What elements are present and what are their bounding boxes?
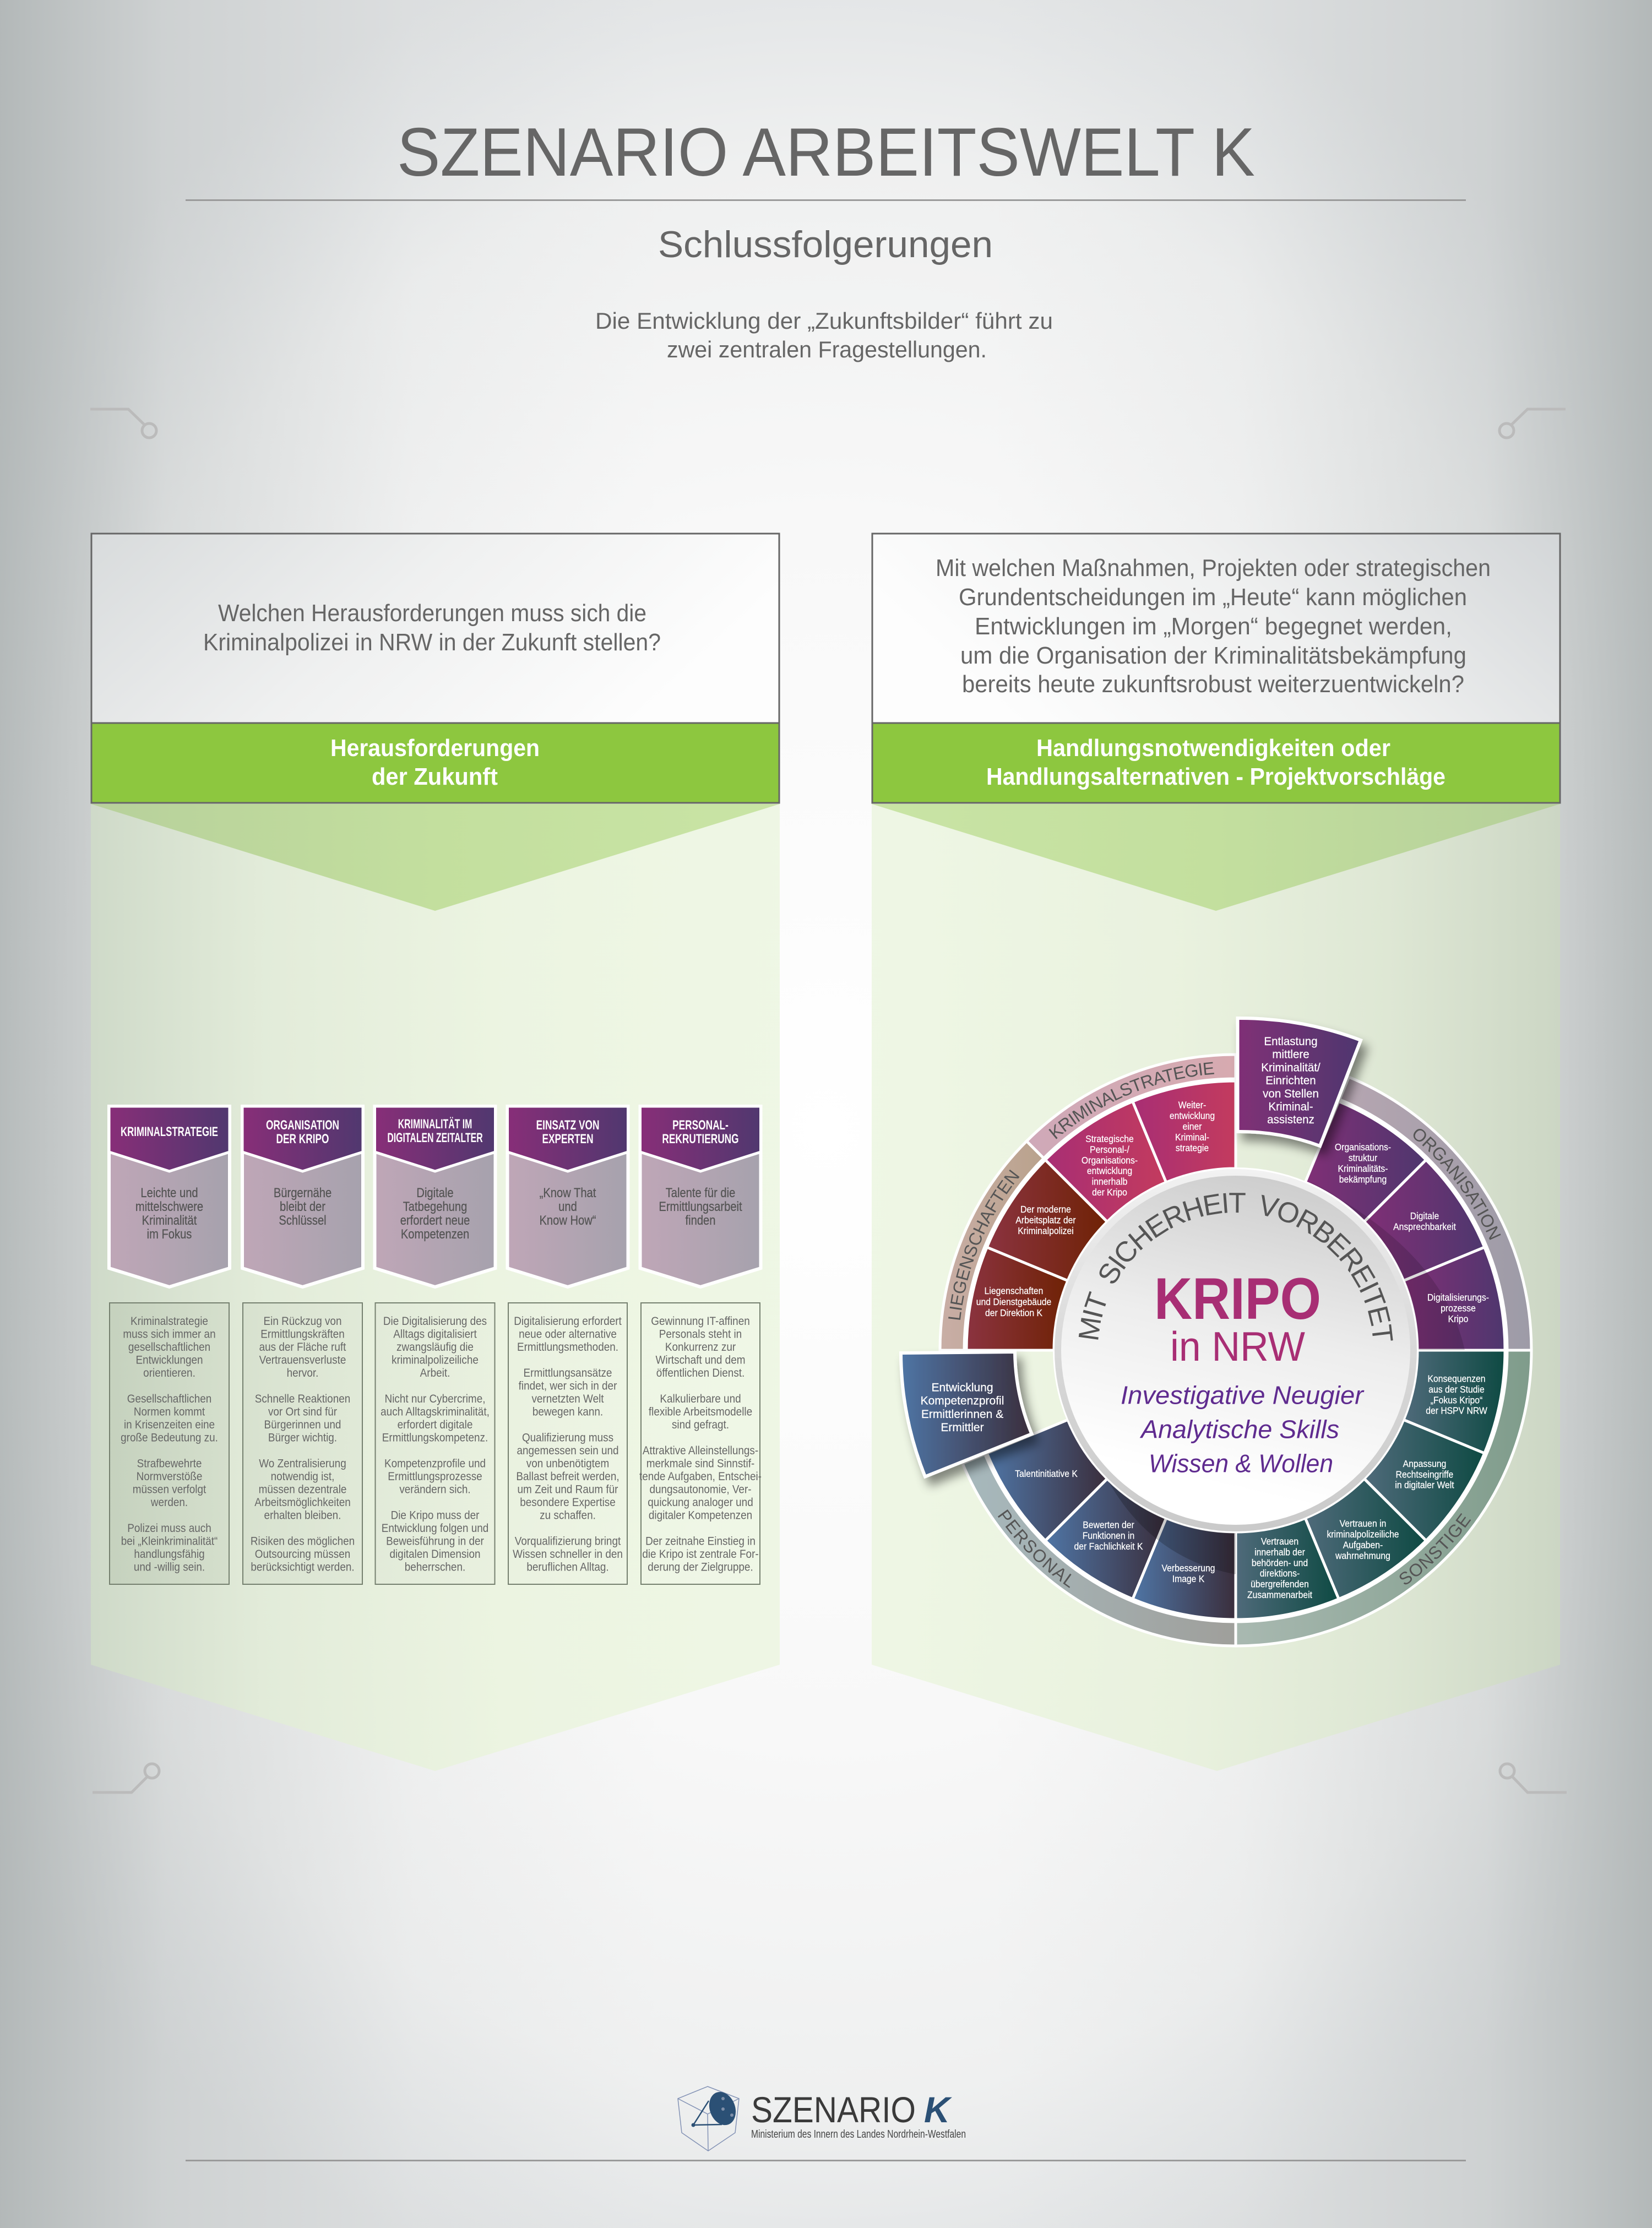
icon: corner mark bottom right	[1500, 1764, 1567, 1792]
shield body	[508, 1106, 628, 1287]
box text: Wissen schneller in den	[513, 1548, 623, 1561]
left green heading: Herausforderungen	[330, 735, 540, 762]
box text: öffentlichen Dienst.	[656, 1367, 745, 1379]
box text: vor Ort sind für	[268, 1405, 337, 1419]
segment labels: Aufgaben-	[1343, 1540, 1383, 1551]
segment labels: Bewerten der	[1083, 1519, 1134, 1530]
box text: bei „Kleinkriminalität“	[121, 1535, 218, 1548]
segment labels: der Fachlichkeit K	[1074, 1541, 1143, 1552]
box text: aus der Fläche ruft	[259, 1341, 346, 1354]
shield statement: „Know That	[540, 1185, 596, 1200]
box text: um Zeit und Raum für	[518, 1483, 618, 1496]
box text: Qualifizierung muss	[522, 1431, 613, 1444]
shield statement	[400, 1185, 470, 1241]
shield statement	[659, 1185, 742, 1227]
right question text	[936, 555, 1491, 698]
header label: PERSONAL-	[672, 1118, 729, 1133]
popped segment text: Ermittler	[941, 1421, 984, 1434]
segment labels: Konsequenzen	[1428, 1373, 1485, 1384]
header label	[662, 1118, 739, 1146]
popped segment text: von Stellen	[1263, 1088, 1319, 1100]
shield body	[242, 1106, 363, 1287]
column 5: Personalrekrutierung	[639, 1106, 762, 1584]
box text: Arbeit.	[420, 1367, 450, 1379]
box text: Entwicklungen	[136, 1354, 203, 1367]
popped segment text: Ermittlerinnen &	[921, 1408, 1003, 1421]
segment labels: strategie	[1176, 1143, 1209, 1154]
segment labels: Kriminal-	[1175, 1132, 1209, 1143]
header label: DIGITALEN ZEITALTER	[387, 1131, 483, 1145]
right question text: um die Organisation der Kriminalitätsbekämpfung	[960, 642, 1466, 669]
left green heading: der Zukunft	[372, 763, 498, 790]
segment: Konsequenzen	[1404, 1350, 1505, 1453]
column 2: Organisation der Kripo	[242, 1106, 363, 1584]
popped segment text: Kriminalität/	[1261, 1061, 1320, 1074]
right question text: bereits heute zukunftsrobust weiterzuentwickeln?	[962, 671, 1464, 698]
box text: Der zeitnahe Einstieg in	[645, 1535, 756, 1548]
ring band: Sonstige	[1236, 1350, 1531, 1646]
segment labels: Anpassung	[1403, 1458, 1446, 1469]
column 4: Einsatz von Experten	[508, 1106, 628, 1584]
segment: Weiterentwicklung	[1133, 1081, 1236, 1182]
shield statement: erfordert neue	[400, 1213, 470, 1227]
right question text: Entwicklungen im „Morgen“ begegnet werden,	[975, 613, 1452, 640]
box text: Ermittlungsprozesse	[388, 1470, 482, 1483]
ring label: Sonstige: SONSTIGE	[1400, 1513, 1471, 1585]
ring band: Kriminalstrategie	[1026, 1055, 1236, 1158]
right green heading: Handlungsnotwendigkeiten oder	[1036, 735, 1390, 762]
popped segment: Entwicklung Kompetenzprofil	[901, 1352, 1032, 1477]
segment: Vertrauen in Aufgabenwahrnehmung	[1305, 1479, 1426, 1599]
segment labels: Ansprechbarkeit	[1393, 1221, 1456, 1232]
segment labels: behörden- und	[1252, 1557, 1308, 1568]
shield statement: Kompetenzen	[401, 1226, 469, 1241]
box text: Ermittlungsansätze	[524, 1367, 612, 1379]
shield statement: Know How“	[539, 1213, 596, 1227]
shield header	[242, 1106, 363, 1171]
shield statement	[539, 1185, 596, 1227]
box text: in Krisenzeiten eine	[124, 1419, 215, 1431]
box text	[121, 1315, 218, 1574]
box text: von unbenötigtem	[526, 1457, 609, 1470]
box text: erfordert digitale	[398, 1419, 472, 1431]
segment labels: innerhalb	[1092, 1176, 1127, 1187]
box text	[513, 1315, 623, 1574]
box text: gesellschaftlichen	[128, 1341, 210, 1354]
box text: Risiken des möglichen	[251, 1535, 355, 1548]
ring band: Liegenschaften	[940, 1141, 1044, 1350]
segment: Organisationsstruktur	[1305, 1101, 1426, 1222]
segment: Liegenschaften	[966, 1247, 1068, 1350]
panel: left arrow chevron	[91, 804, 780, 911]
segment: Talentinitiative	[987, 1420, 1107, 1541]
box text: vernetzten Welt	[531, 1393, 604, 1405]
box text: Normen kommt	[134, 1405, 205, 1419]
segment labels: Arbeitsplatz der	[1015, 1215, 1076, 1226]
segment labels: „Fokus Kripo“	[1431, 1395, 1482, 1406]
box text: Wirtschaft und dem	[656, 1354, 745, 1367]
intro text	[595, 308, 1053, 362]
box text: Attraktive Alleinstellungs-	[643, 1444, 758, 1457]
box text: Alltags digitalisiert	[393, 1328, 477, 1341]
box text: Kalkulierbare und	[660, 1393, 741, 1405]
left question text: Welchen Herausforderungen muss sich die	[218, 600, 646, 627]
shield statement	[274, 1185, 332, 1227]
box text: die Kripo ist zentrale For-	[642, 1548, 759, 1561]
popped segment text: Entlastung	[1264, 1035, 1318, 1048]
header label: EINSATZ VON	[536, 1118, 599, 1133]
popped segment text: assistenz	[1267, 1113, 1314, 1126]
header label: DER KRIPO	[276, 1132, 329, 1146]
box text: Kriminalstrategie	[131, 1315, 208, 1328]
segment labels: der Direktion K	[985, 1307, 1042, 1318]
popped segment text: Entwicklung	[931, 1381, 993, 1394]
box text: Bürgerinnen und	[264, 1419, 341, 1431]
right question text: Grundentscheidungen im „Heute“ kann möglichen	[959, 584, 1467, 611]
box text: angemessen sein und	[517, 1444, 619, 1457]
shield statement: Talente für die	[666, 1185, 735, 1200]
segment labels: Rechtseingriffe	[1396, 1469, 1453, 1480]
box text: Strafbewehrte	[137, 1457, 202, 1470]
shield header	[508, 1106, 628, 1171]
right green heading: Handlungsalternativen - Projektvorschläge	[986, 763, 1446, 790]
box text: Nicht nur Cybercrime,	[385, 1393, 485, 1405]
text box	[243, 1303, 362, 1584]
segment: Vertrauen innerhalb	[1236, 1518, 1339, 1620]
right green heading	[872, 723, 1560, 803]
segment labels: Organisations-	[1335, 1142, 1391, 1153]
segment labels: in digitaler Welt	[1395, 1480, 1454, 1491]
ring label: Personal: PERSONAL	[998, 1509, 1072, 1588]
box text: Normverstöße	[137, 1470, 202, 1483]
logo subtitle: Ministerium des Innern des Landes Nordrhein-Westfalen	[751, 2128, 966, 2140]
popped segment: Entlastung	[1238, 1018, 1361, 1146]
box text: zwangsläufig die	[396, 1341, 474, 1354]
panel: right arrow chevron	[872, 804, 1560, 911]
segment labels: der HSPV NRW	[1426, 1405, 1487, 1416]
popped segment text: Kriminal-	[1268, 1100, 1313, 1113]
segment labels: Kriminalpolizei	[1018, 1225, 1074, 1236]
segment: Anpassung Rechtseingriffe	[1364, 1420, 1485, 1541]
logo K: K	[924, 2089, 952, 2130]
icon: corner mark top left	[90, 409, 156, 438]
shield statement: Ermittlungsarbeit	[659, 1199, 742, 1214]
segment labels: der Kripo	[1092, 1187, 1127, 1198]
column 3: Kriminalität im digitalen Zeitalter	[374, 1106, 496, 1584]
box text: digitaler Kompetenzen	[649, 1509, 752, 1522]
box text: Vertrauensverluste	[259, 1354, 346, 1367]
text box	[508, 1303, 627, 1584]
intro text: zwei zentralen Fragestellungen.	[667, 336, 987, 362]
in NRW: in NRW	[1170, 1323, 1305, 1370]
segment labels: Strategische	[1085, 1133, 1134, 1144]
italic lines: Investigative Neugier	[1121, 1381, 1365, 1410]
box text: Arbeitsmöglichkeiten	[254, 1496, 351, 1509]
box text: Ermittlungsmethoden.	[517, 1341, 618, 1354]
shadow crescent upper right	[1307, 1181, 1465, 1350]
segment labels: direktions-	[1260, 1568, 1300, 1579]
box text: Konkurrenz zur	[665, 1341, 736, 1354]
icon: cube with ellipse	[678, 2086, 740, 2151]
box text: müssen dezentrale	[259, 1483, 346, 1496]
segment labels: Vertrauen	[1261, 1536, 1298, 1547]
box text: und -willig sein.	[134, 1561, 205, 1574]
segment labels: entwicklung	[1170, 1110, 1215, 1121]
box text: erhalten bleiben.	[264, 1509, 341, 1522]
box text: handlungsfähig	[134, 1548, 205, 1561]
text box	[641, 1303, 760, 1584]
box text: Ein Rückzug von	[264, 1315, 341, 1328]
segment: Digitale Ansprechbarkeit	[1364, 1160, 1485, 1281]
shield header	[374, 1106, 496, 1171]
segment labels: kriminalpolizeiliche	[1327, 1529, 1399, 1540]
box text: tende Aufgaben, Entschei-	[639, 1470, 762, 1483]
shield statement: Digitale	[416, 1185, 454, 1200]
text box	[110, 1303, 229, 1584]
segment labels: Personal-/	[1090, 1144, 1129, 1155]
shadow crescent lower left	[1107, 1479, 1236, 1574]
segment labels: einer	[1183, 1121, 1202, 1132]
box text: derung der Zielgruppe.	[648, 1561, 753, 1574]
header label	[536, 1118, 599, 1146]
segment labels: Weiter-	[1178, 1100, 1206, 1111]
panel: left question box	[91, 534, 779, 723]
box text: Personals steht in	[659, 1328, 742, 1341]
shield statement: Tatbegehung	[403, 1199, 467, 1214]
segment labels: und Dienstgebäude	[976, 1296, 1051, 1307]
segment labels: aus der Studie	[1428, 1384, 1485, 1395]
popped segment text: mittlere	[1272, 1048, 1309, 1061]
segment labels: Kripo	[1448, 1313, 1468, 1324]
segment labels: entwicklung	[1087, 1165, 1132, 1176]
segment labels: übergreifenden	[1251, 1579, 1309, 1590]
shield statement: Schlüssel	[279, 1213, 327, 1227]
box text: kriminalpolizeiliche	[392, 1354, 479, 1367]
segment: Bewerten der Funktionen	[1045, 1479, 1166, 1599]
box text: muss sich immer an	[123, 1328, 216, 1341]
curved slogan: MIT SICHERHEIT VORBEREITET	[1078, 1193, 1393, 1341]
segment labels: Der moderne	[1020, 1204, 1071, 1215]
segment labels	[976, 1100, 1489, 1600]
box text: müssen verfolgt	[133, 1483, 206, 1496]
box text: Wo Zentralisierung	[259, 1457, 346, 1470]
box text: beherrschen.	[405, 1561, 465, 1574]
box text: Digitalisierung erfordert	[514, 1315, 622, 1328]
segment labels: wahrnehmung	[1335, 1550, 1390, 1561]
intro text: Die Entwicklung der „Zukunftsbilder“ führt zu	[595, 308, 1053, 334]
box text: Gesellschaftlichen	[127, 1393, 211, 1405]
shield header	[640, 1106, 761, 1171]
segment labels: innerhalb der	[1254, 1547, 1305, 1558]
icon: corner mark top right	[1499, 409, 1566, 438]
segment labels: Funktionen in	[1083, 1530, 1134, 1541]
segment labels: Digitale	[1410, 1210, 1439, 1221]
header label: ORGANISATION	[266, 1118, 339, 1133]
shield statement: Bürgernähe	[274, 1185, 332, 1200]
shield statement: und	[558, 1199, 577, 1214]
box text: Vorqualifizierung bringt	[515, 1535, 621, 1548]
box text: Polizei muss auch	[127, 1522, 211, 1535]
italic lines	[1121, 1381, 1365, 1478]
popped segment text	[1261, 1035, 1320, 1126]
subtitle: Schlussfolgerungen	[658, 224, 993, 265]
box text: Beweisführung in der	[386, 1535, 484, 1548]
segment labels: Talentinitiative K	[1015, 1468, 1078, 1479]
panel: right question box	[872, 534, 1560, 723]
box text: findet, wer sich in der	[519, 1379, 617, 1393]
box text: Kompetenzprofile und	[384, 1457, 486, 1470]
panel: right arrow background	[872, 803, 1560, 1771]
segment labels: bekämpfung	[1339, 1174, 1387, 1185]
box text: hervor.	[287, 1367, 318, 1379]
segment labels: Liegenschaften	[985, 1285, 1043, 1296]
italic lines: Wissen & Wollen	[1149, 1449, 1333, 1478]
header label: KRIMINALITÄT IM	[398, 1117, 472, 1132]
box text: orientieren.	[143, 1367, 195, 1379]
wheel diagram	[898, 1017, 1533, 1648]
italic lines: Analytische Skills	[1139, 1415, 1339, 1444]
popped segment text	[921, 1381, 1004, 1434]
left question text: Kriminalpolizei in NRW in der Zukunft stellen?	[203, 629, 661, 656]
segment labels: Verbesserung	[1161, 1563, 1215, 1574]
segment labels: Digitalisierungs-	[1427, 1292, 1489, 1303]
left question text	[203, 600, 661, 656]
box text: besondere Expertise	[520, 1496, 616, 1509]
segment labels: Image K	[1172, 1573, 1204, 1584]
segment: Verbesserung Image	[1133, 1518, 1236, 1620]
shield statement: Kriminalität	[142, 1213, 197, 1227]
popped segment text: Kompetenzprofil	[921, 1395, 1004, 1408]
box text: zu schaffen.	[540, 1509, 596, 1522]
shield statement: im Fokus	[147, 1226, 192, 1241]
box text: Ermittlungskompetenz.	[382, 1431, 488, 1444]
box text: Die Kripo muss der	[391, 1509, 480, 1522]
ring label: Organisation: ORGANISATION	[1413, 1129, 1501, 1240]
logo wordmark: SZENARIO	[751, 2089, 916, 2130]
shield body	[109, 1106, 230, 1287]
box text	[381, 1315, 490, 1574]
box text	[639, 1315, 762, 1574]
box text	[251, 1315, 355, 1574]
segment labels: Organisations-	[1082, 1155, 1138, 1166]
shield header	[109, 1106, 230, 1171]
ring label: Liegenschaften: LIEGENSCHAFTEN	[948, 1170, 1020, 1320]
header label: EXPERTEN	[542, 1132, 594, 1146]
segment labels: Vertrauen in	[1340, 1518, 1386, 1529]
box text: Ballast befreit werden,	[516, 1470, 620, 1483]
header label: KRIMINALSTRATEGIE	[121, 1124, 218, 1139]
shield body	[374, 1106, 496, 1287]
shield statement: mittelschwere	[135, 1199, 203, 1214]
KRIPO heading: KRIPO	[1154, 1265, 1321, 1332]
box text: bewegen kann.	[532, 1405, 603, 1419]
box text: flexible Arbeitsmodelle	[649, 1405, 752, 1419]
ring band: Organisation	[1340, 1077, 1531, 1350]
box text: Ermittlungskräften	[260, 1328, 345, 1341]
box text: neue oder alternative	[519, 1328, 617, 1341]
column 1: Kriminalstrategie	[109, 1106, 230, 1584]
box text: berücksichtigt werden.	[251, 1561, 355, 1574]
box text: werden.	[150, 1496, 188, 1509]
segment labels: Zusammenarbeit	[1247, 1589, 1312, 1600]
box text: sind gefragt.	[672, 1419, 729, 1431]
box text: beruflichen Alltag.	[526, 1561, 609, 1574]
box text: dungsautonomie, Ver-	[649, 1483, 752, 1496]
segment: Arbeitsplatz	[987, 1160, 1107, 1281]
footer logo	[678, 2086, 966, 2151]
box text: Outsourcing müssen	[255, 1548, 350, 1561]
box text: große Bedeutung zu.	[121, 1431, 218, 1444]
text box	[376, 1303, 494, 1584]
shield statement: bleibt der	[280, 1199, 326, 1214]
box text: digitalen Dimension	[389, 1548, 481, 1561]
header label	[387, 1117, 483, 1145]
box text: Entwicklung folgen und	[382, 1522, 488, 1535]
segment: Digitalisierungsprozesse	[1404, 1247, 1505, 1350]
segment labels: prozesse	[1441, 1303, 1476, 1314]
segment labels: struktur	[1349, 1153, 1378, 1164]
left green heading	[91, 723, 779, 803]
shield statement	[135, 1185, 203, 1241]
title: SZENARIO ARBEITSWELT K	[397, 115, 1255, 191]
header label: REKRUTIERUNG	[662, 1132, 739, 1146]
box text: merkmale sind Sinnstif-	[646, 1457, 754, 1470]
ring band: Personal	[963, 1454, 1236, 1646]
box text: quickung analoger und	[648, 1496, 753, 1509]
box text: Gewinnung IT-affinen	[651, 1315, 750, 1328]
panel: left arrow background	[91, 803, 780, 1771]
icon: corner mark bottom left	[93, 1764, 159, 1792]
shield statement: Leichte und	[140, 1185, 198, 1200]
box text: Schnelle Reaktionen	[255, 1393, 350, 1405]
popped segment text: Einrichten	[1265, 1074, 1316, 1087]
segment: Strategische Entwicklung	[1045, 1101, 1166, 1222]
segment labels: Kriminalitäts-	[1338, 1163, 1388, 1174]
shield statement: finden	[686, 1213, 715, 1227]
header label	[266, 1118, 339, 1146]
box text: Bürger wichtig.	[268, 1431, 337, 1444]
box text: notwendig ist,	[271, 1470, 334, 1483]
ring label: Kriminalstrategie: KRIMINALSTRATEGIE	[1048, 1062, 1214, 1139]
centre disc	[1053, 1167, 1419, 1533]
box text: Die Digitalisierung des	[383, 1315, 487, 1328]
box text: verändern sich.	[399, 1483, 471, 1496]
box text: auch Alltagskriminalität,	[381, 1405, 490, 1419]
shield body	[640, 1106, 761, 1287]
right question text: Mit welchen Maßnahmen, Projekten oder strategischen	[936, 555, 1491, 582]
